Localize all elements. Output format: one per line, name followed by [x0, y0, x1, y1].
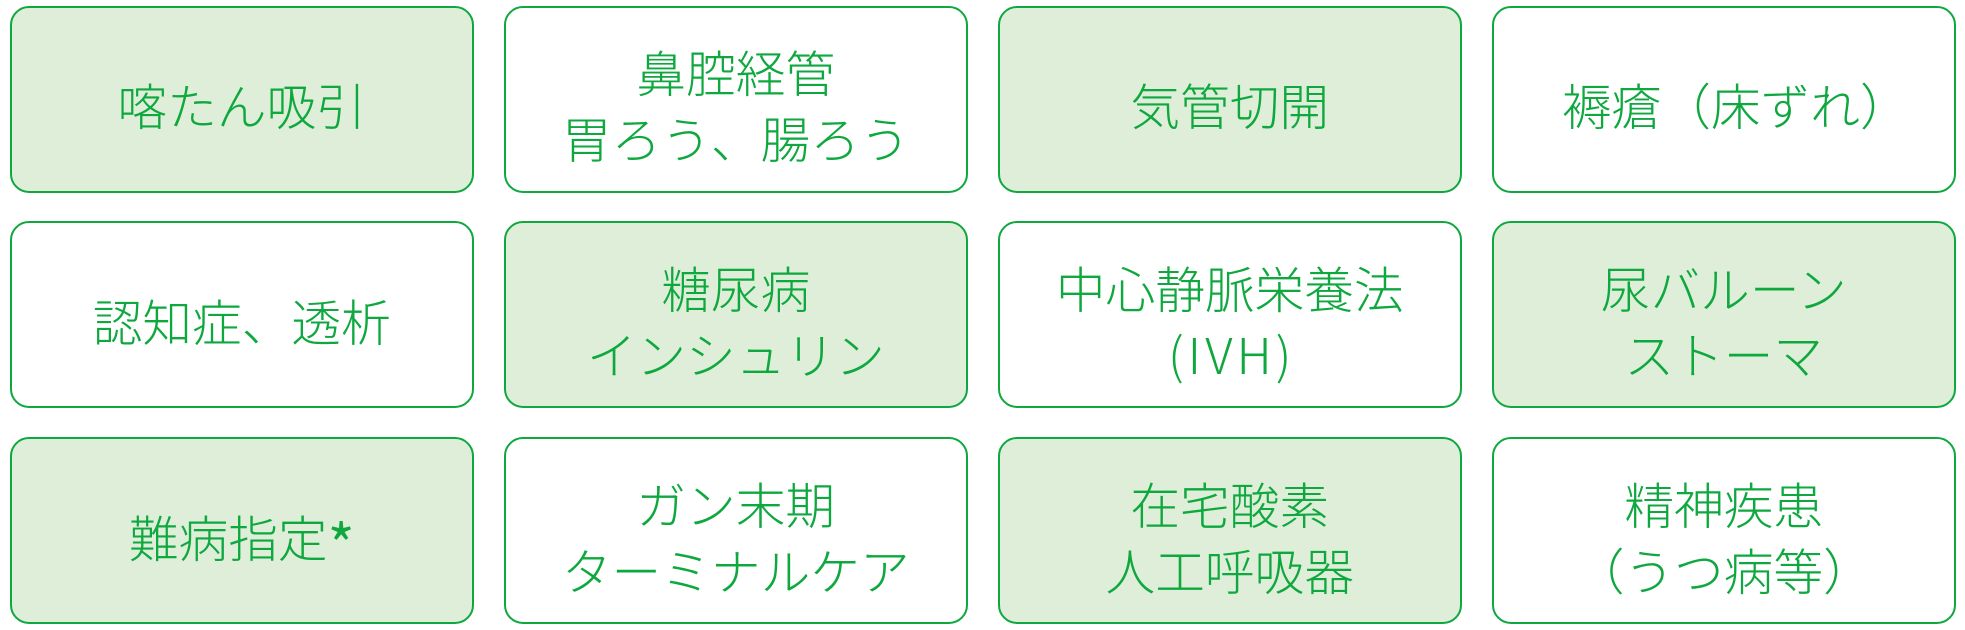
panel: diabetes insulin: インシュリン [587, 316, 885, 388]
panel: designated intractable disease: 難病指定* [129, 500, 355, 584]
panel: designated intractable disease [10, 437, 474, 624]
panel: central venous nutrition [998, 221, 1462, 408]
panel: tube feeding: 胃ろう、腸ろう [562, 101, 910, 173]
panel: terminal cancer care [504, 437, 968, 624]
panel: dementia and dialysis [10, 221, 474, 408]
panel: tube feeding [504, 6, 968, 192]
panel: diabetes insulin: 糖尿病 [661, 250, 810, 322]
panel: tracheotomy [998, 6, 1462, 192]
panel: home oxygen and ventilator: 人工呼吸器 [1106, 532, 1354, 604]
panel: tracheotomy: 気管切開 [1130, 68, 1329, 140]
panel: tube feeding: 鼻腔経管 [636, 35, 835, 107]
panel: diabetes insulin [504, 221, 968, 408]
panel: suction [10, 6, 474, 192]
panel: central venous nutrition: (IVH) [1168, 316, 1295, 388]
panel: bedsores: 褥瘡（床ずれ） [1562, 68, 1910, 140]
panel: terminal cancer care: ガン末期 [636, 466, 835, 538]
panel: mental illness [1492, 437, 1956, 624]
panel: central venous nutrition: 中心静脈栄養法 [1056, 250, 1404, 322]
panel: home oxygen and ventilator [998, 437, 1462, 624]
panel: urinary balloon and stoma [1492, 221, 1956, 408]
panel: suction: 喀たん吸引 [118, 68, 366, 140]
panel: home oxygen and ventilator: 在宅酸素 [1130, 466, 1329, 538]
panel: terminal cancer care: ターミナルケア [562, 532, 910, 604]
panel: bedsores [1492, 6, 1956, 192]
panel: dementia and dialysis: 認知症、透析 [93, 284, 391, 356]
panel: urinary balloon and stoma: ストーマ [1624, 316, 1823, 388]
panel: mental illness: （うつ病等） [1575, 532, 1873, 604]
panel: mental illness: 精神疾患 [1624, 466, 1823, 538]
panel: urinary balloon and stoma: 尿バルーン [1601, 250, 1847, 322]
